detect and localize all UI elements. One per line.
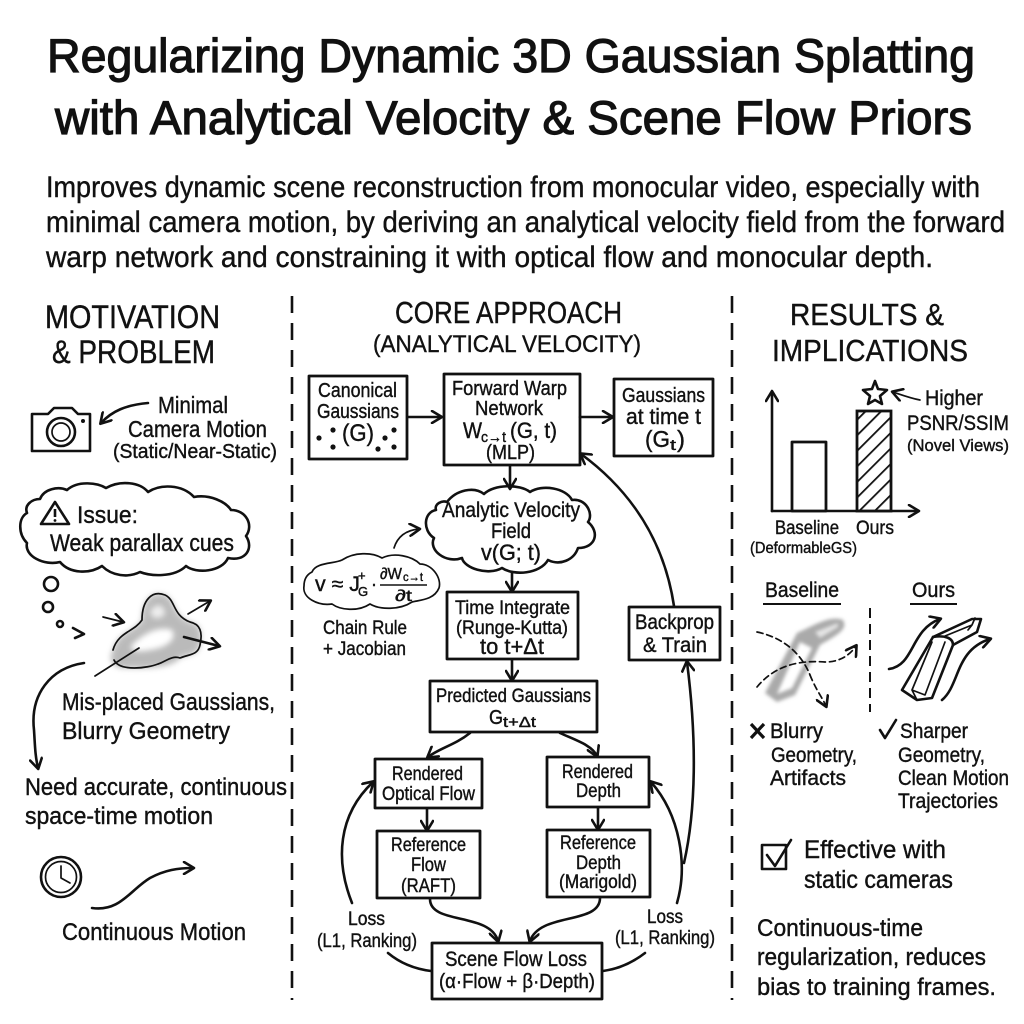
text: minimal camera motion: Minimal bbox=[158, 392, 228, 418]
cloud: velocity formula: ∂t bbox=[395, 588, 413, 605]
icon: clock bbox=[41, 857, 81, 897]
cloud: analytic velocity field bbox=[426, 486, 595, 573]
panel: results and implications bbox=[750, 297, 1009, 1001]
bar chart bbox=[750, 392, 918, 557]
heading: results bbox=[772, 297, 968, 368]
box: rendered depth bbox=[547, 757, 649, 807]
arrow: blob to need bbox=[33, 663, 84, 768]
label: left loss: Loss bbox=[348, 909, 385, 930]
label: right loss: (L1, Ranking) bbox=[615, 928, 715, 949]
cloud: velocity formula: G bbox=[358, 584, 368, 599]
icon: warning bbox=[41, 502, 69, 524]
text: chain rule jacobian: + Jacobian bbox=[323, 639, 406, 660]
bar chart: Ours bbox=[856, 518, 894, 539]
text: baseline result: Blurry bbox=[770, 720, 823, 743]
icon: camera bbox=[32, 408, 90, 451]
text: ours result: Clean Motion bbox=[898, 767, 1009, 790]
box: reference flow: Flow bbox=[411, 855, 446, 876]
text: baseline result: Artifacts bbox=[770, 767, 846, 790]
box: predicted gaussians: G bbox=[489, 707, 503, 729]
box: reference depth: (Marigold) bbox=[559, 872, 637, 893]
heading: core approach: CORE APPROACH bbox=[395, 295, 622, 330]
icon: checkbox bbox=[762, 840, 791, 869]
text: need accurate motion: space-time motion bbox=[25, 803, 213, 830]
box: gaussians at time t: (G bbox=[645, 426, 670, 452]
panel: motivation and problem bbox=[20, 299, 287, 946]
arrow: formula to cloud bbox=[394, 529, 419, 548]
heading: core approach bbox=[373, 295, 641, 358]
text: minimal camera motion: (Static/Near-Static) bbox=[113, 441, 277, 463]
cloud: velocity formula: · bbox=[371, 574, 377, 594]
text: ours result bbox=[880, 720, 1009, 813]
text: continuous time: bias to training frames. bbox=[757, 974, 996, 1001]
icon: star bbox=[863, 381, 887, 404]
label: left loss bbox=[317, 909, 417, 952]
text: effective: static cameras bbox=[804, 866, 953, 894]
arrow: loss to backprop bbox=[684, 662, 694, 863]
cloud: velocity formula: + bbox=[358, 568, 366, 583]
text: need accurate motion: Need accurate, continuous bbox=[25, 774, 287, 801]
box: canonical gaussians: Canonical bbox=[318, 380, 397, 402]
box: scene flow loss: Scene Flow Loss bbox=[445, 948, 587, 971]
text: baseline result bbox=[751, 720, 857, 790]
text: baseline result: Geometry, bbox=[771, 744, 857, 767]
arrow: rendered flow to reference flow bbox=[426, 809, 428, 830]
cloud: analytic velocity field: v(G; t) bbox=[481, 540, 541, 565]
callout: issue cloud bbox=[20, 483, 249, 575]
text: chain rule jacobian: Chain Rule bbox=[323, 618, 407, 639]
text: minimal camera motion: Camera Motion bbox=[128, 416, 267, 442]
text: misplaced gaussians bbox=[62, 689, 275, 745]
cloud: velocity formula: ∂W bbox=[380, 566, 403, 583]
illustration: blurry gaussian blob bbox=[95, 594, 219, 676]
arrow: predicted to rendered depth bbox=[560, 733, 597, 756]
box: canonical gaussians: Gaussians bbox=[317, 401, 399, 423]
arrow: warp to gaussians at t bbox=[580, 416, 612, 418]
cloud: analytic velocity field: Analytic Velocity bbox=[442, 499, 580, 522]
arrow: cloud to integrate bbox=[511, 572, 513, 591]
arrow: backprop to warp bbox=[581, 454, 674, 606]
heading: motivation: MOTIVATION bbox=[45, 299, 220, 335]
heading: motivation: & PROBLEM bbox=[52, 334, 215, 370]
text: higher psnr: Higher bbox=[925, 387, 983, 410]
box: scene flow loss bbox=[432, 943, 602, 999]
box: rendered depth: Depth bbox=[576, 781, 621, 802]
box: reference flow: Reference bbox=[391, 835, 466, 856]
illustration: sharp ours shape bbox=[889, 618, 990, 700]
box: time integrate bbox=[447, 592, 578, 659]
box: forward warp network: (G, t) bbox=[510, 418, 557, 443]
panel: core approach bbox=[304, 295, 720, 999]
heading: ours: Ours bbox=[912, 579, 955, 602]
heading: motivation bbox=[45, 299, 220, 370]
text: continuous time bbox=[757, 915, 996, 1001]
text: higher psnr: PSNR/SSIM bbox=[907, 412, 1009, 435]
cloud: velocity formula: c→t bbox=[403, 570, 424, 584]
box: gaussians at time t bbox=[614, 379, 713, 456]
text: continuous time: Continuous-time bbox=[757, 915, 923, 942]
box: gaussians at time t: at time t bbox=[626, 404, 701, 429]
box: forward warp network: (MLP) bbox=[486, 442, 535, 464]
box: backprop and train: Backprop bbox=[635, 611, 714, 634]
title bbox=[47, 29, 975, 144]
heading: baseline: Baseline bbox=[765, 579, 839, 602]
box: reference depth: Reference bbox=[560, 833, 636, 854]
title: Regularizing Dynamic 3D Gaussian Splatting bbox=[47, 29, 975, 82]
box: time integrate: Time Integrate bbox=[455, 598, 570, 619]
box: canonical gaussians: (G) bbox=[342, 420, 374, 447]
arrow: reference depth to scene flow loss bbox=[530, 898, 600, 941]
cloud: velocity formula bbox=[304, 554, 440, 609]
box: rendered optical flow: Optical Flow bbox=[382, 784, 475, 805]
intro text: warp network and constraining it with optical flow and monocular depth. bbox=[45, 241, 933, 274]
text: effective: Effective with bbox=[804, 836, 946, 864]
box: rendered optical flow bbox=[375, 759, 482, 808]
text: need accurate motion bbox=[25, 774, 287, 830]
box: rendered optical flow: Rendered bbox=[392, 764, 463, 785]
title: with Analytical Velocity & Scene Flow Priors bbox=[54, 91, 972, 144]
box: time integrate: (Runge-Kutta) bbox=[456, 618, 568, 639]
arrow: predicted to rendered flow bbox=[428, 733, 470, 757]
box: backprop and train bbox=[629, 607, 720, 660]
bar chart: Baseline bbox=[775, 518, 839, 539]
arrow: rendered depth to reference depth bbox=[597, 808, 599, 829]
text: ours result: Sharper bbox=[900, 720, 968, 743]
box: gaussians at time t: Gaussians bbox=[622, 385, 705, 407]
text: ours result: Trajectories bbox=[898, 790, 998, 813]
text: misplaced gaussians: Blurry Geometry bbox=[62, 718, 230, 745]
box: time integrate: to t+Δt bbox=[480, 634, 544, 659]
label: right loss: Loss bbox=[647, 907, 683, 928]
box: gaussians at time t: ) bbox=[677, 426, 685, 452]
box: gaussians at time t: t bbox=[670, 437, 677, 454]
callout: issue cloud: Weak parallax cues bbox=[50, 530, 234, 557]
cloud: velocity formula: v ≈ J bbox=[315, 573, 360, 596]
label: left loss: (L1, Ranking) bbox=[317, 931, 417, 952]
box: predicted gaussians: t+Δt bbox=[503, 714, 537, 731]
box: forward warp network bbox=[444, 374, 580, 465]
bar chart: (DeformableGS) bbox=[750, 540, 857, 557]
cloud: analytic velocity field: Field bbox=[491, 520, 531, 543]
arrow: canonical to warp bbox=[408, 416, 441, 418]
box: forward warp network: Forward Warp bbox=[452, 378, 567, 400]
box: canonical gaussians bbox=[309, 376, 407, 459]
box: reference flow: (RAFT) bbox=[401, 876, 456, 897]
box: backprop and train: & Train bbox=[643, 634, 707, 657]
arrow: to star bbox=[893, 392, 920, 400]
text: misplaced gaussians: Mis-placed Gaussians, bbox=[62, 689, 275, 716]
text: higher psnr: (Novel Views) bbox=[907, 436, 1009, 455]
box: forward warp network: c→t bbox=[481, 429, 507, 446]
box: predicted gaussians: Predicted Gaussians bbox=[436, 686, 591, 707]
thought bubbles bbox=[43, 577, 84, 638]
heading: results: IMPLICATIONS bbox=[772, 333, 968, 368]
box: scene flow loss: (α·Flow + β·Depth) bbox=[439, 971, 595, 993]
arrow: continuous motion bbox=[92, 868, 193, 908]
box: reference depth: Depth bbox=[576, 853, 621, 874]
box: predicted gaussians bbox=[430, 681, 597, 732]
box: reference depth bbox=[547, 830, 650, 897]
text: chain rule jacobian bbox=[323, 618, 407, 660]
arrow: to camera bbox=[101, 403, 148, 423]
text: effective bbox=[804, 836, 953, 894]
text: ours result: Geometry, bbox=[898, 744, 985, 767]
box: forward warp network: Network bbox=[475, 398, 544, 420]
heading: results: RESULTS & bbox=[790, 297, 944, 332]
arrow: loss to rendered depth bbox=[651, 782, 682, 903]
illustration: blurry baseline shape bbox=[757, 619, 856, 706]
text: minimal camera motion bbox=[113, 392, 277, 463]
arrow: loss to rendered flow bbox=[342, 782, 373, 903]
text: continuous motion: Continuous Motion bbox=[62, 919, 246, 946]
arrow: reference flow to scene flow loss bbox=[430, 899, 498, 941]
box: reference flow bbox=[377, 831, 480, 898]
text: continuous time: regularization, reduces bbox=[757, 944, 986, 971]
arrow: integrate to predicted bbox=[511, 660, 513, 680]
box: forward warp network: W bbox=[463, 418, 482, 443]
intro text bbox=[45, 171, 1005, 274]
callout: issue cloud: Issue: bbox=[77, 502, 138, 529]
heading: core approach: (ANALYTICAL VELOCITY) bbox=[373, 331, 641, 358]
arrow: warp to velocity field bbox=[509, 466, 511, 488]
box: rendered depth: Rendered bbox=[562, 762, 633, 783]
text: higher psnr bbox=[907, 387, 1009, 455]
label: right loss bbox=[615, 907, 715, 949]
